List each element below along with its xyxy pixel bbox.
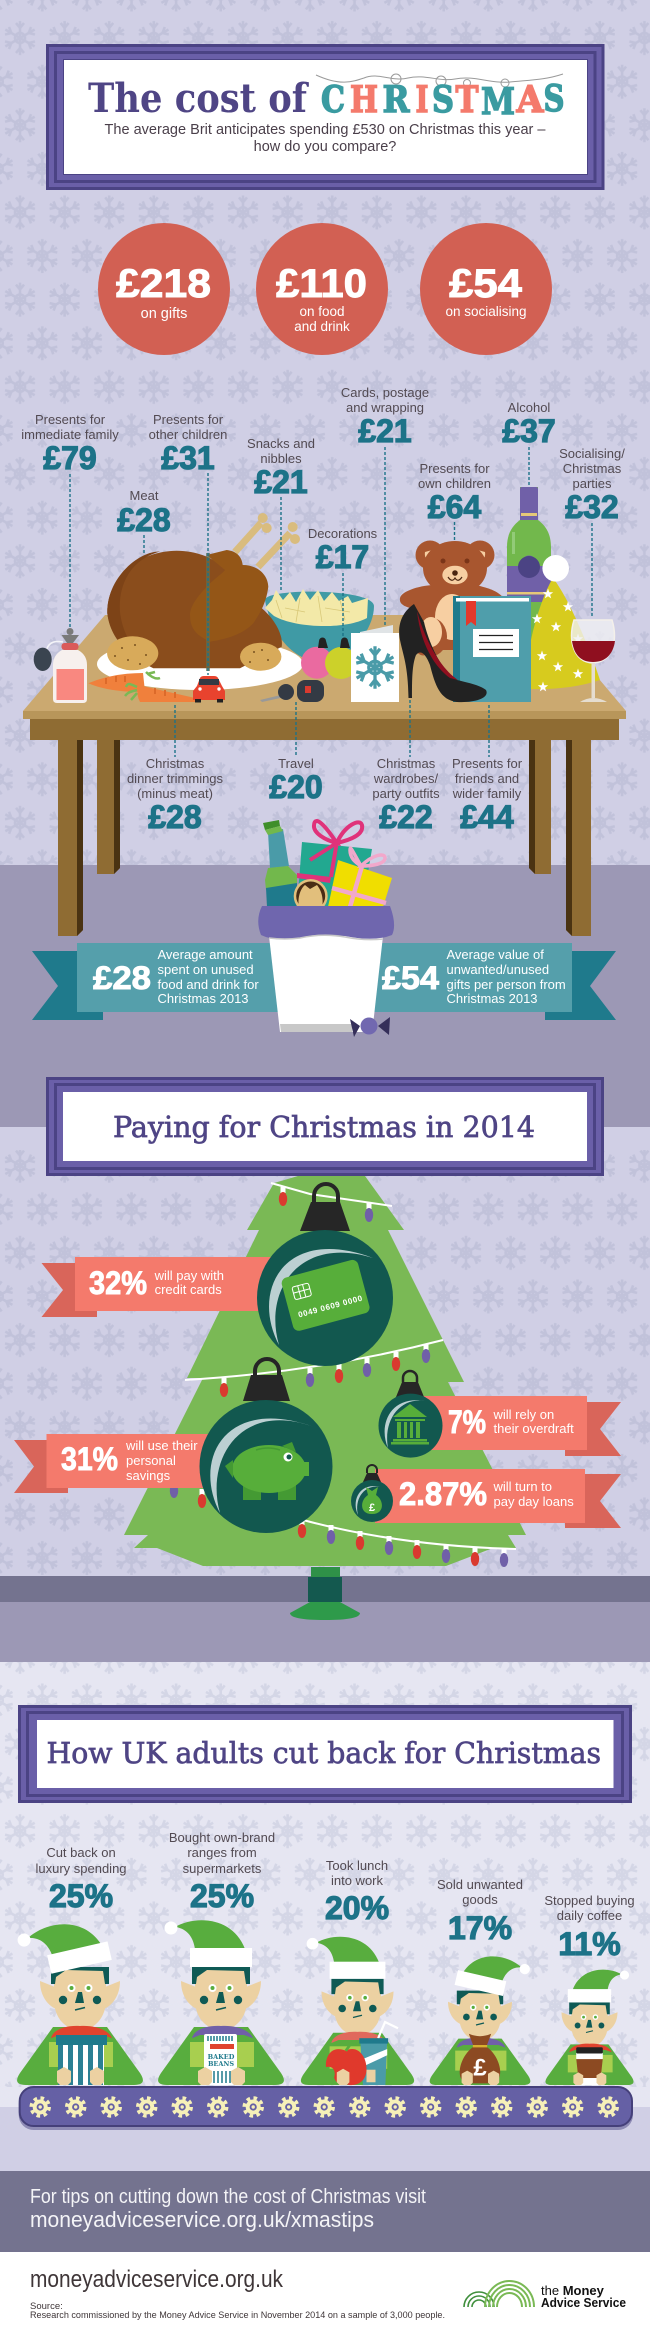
banner: credit cards: 32% [89,1265,147,1301]
stat circle: food and drink: on food [299,304,345,319]
label: snacks and nibbles [247,436,315,500]
label: dinner trimmings: (minus meat) [137,786,213,801]
label: lunch into work: Took lunch [326,1858,388,1873]
conveyor belt [19,2087,633,2130]
label: presents for other children: Presents for [153,412,224,427]
footer: Source: [30,2301,63,2312]
label: luxury spending [35,1845,127,1914]
label: own-brand ranges: Bought own-brand [169,1830,275,1845]
stat circle: socialising: on socialising [445,304,527,319]
label: own-brand ranges: 25% [190,1878,254,1914]
stat: unused food [93,947,259,1006]
icon: money bag: £ [369,1502,375,1514]
label: lunch into work: into work [331,1873,384,1888]
icon: party hat [531,555,600,691]
banner: pay day loans [375,1469,621,1528]
heading: bauble letters CHRISTMAS: R [382,79,410,121]
banner: credit cards: will pay with [154,1268,224,1283]
elf: baked beans: BAKED [208,2053,235,2061]
label: wardrobes [372,756,440,835]
heading: bauble letters CHRISTMAS: T [456,79,479,121]
bauble: money bag [351,1465,393,1522]
panel: top wallpaper [0,0,650,865]
label: sold unwanted goods: Sold unwanted [437,1877,523,1892]
label: daily coffee: 11% [558,1926,621,1962]
tree section heading [46,1077,604,1176]
banner: pay day loans: 2.87% [399,1476,487,1512]
icon: piggy bank [225,1442,309,1500]
label: socialising: parties [572,476,612,491]
icon: book [453,596,531,702]
subtitle: The average Brit anticipates spending £530 on Christmas this year – [104,122,546,138]
icon: Christmas card [351,625,399,702]
call to action banner: moneyadviceservice.org.uk/xmastips [30,2207,374,2232]
icon: wine glass [572,620,615,702]
label: decorations [308,526,378,575]
call to action banner [0,2171,650,2252]
stat: unused food: food and drink for [158,977,259,992]
label: luxury spending: luxury spending [35,1861,127,1876]
label: dinner trimmings: Christmas [146,756,205,771]
panel: top floor [0,865,650,1127]
elf: lunch [301,1937,414,2085]
label: presents for immediate family: immediate family [21,427,119,442]
banner: personal savings: personal [126,1453,176,1468]
label: alcohol: £37 [502,413,556,449]
stat: unused gifts: Average value of [446,947,544,962]
heading: bauble letters CHRISTMAS: C [321,79,345,121]
stat circle: food and drink: and drink [294,319,350,334]
banner: credit cards [42,1257,275,1317]
label: socialising: £32 [565,489,619,525]
label: sold unwanted goods: goods [462,1892,498,1907]
label: snacks and nibbles: Snacks and [247,436,315,451]
banner: overdraft: will rely on [492,1407,554,1422]
label: wardrobes: Christmas [377,756,436,771]
elf: coffee [545,1970,634,2085]
stat circle: food and drink [256,223,388,355]
label: cards, postage and wrapping [341,385,429,449]
label: daily coffee [544,1893,635,1962]
stat: unused food: spent on unused [158,962,254,977]
stat circle: gifts: on gifts [141,306,187,322]
stat: unused food: Christmas 2013 [158,991,249,1006]
bauble: bank [378,1371,442,1458]
heading: The cost of: The cost of [88,75,309,122]
label: dinner trimmings [127,756,224,835]
stat circle: food and drink: £110 [276,262,367,306]
heading: bauble letters CHRISTMAS: S [544,78,564,120]
label: own-brand ranges: supermarkets [183,1861,262,1876]
icon: bank [391,1404,429,1444]
title panel [46,44,604,190]
footer: Research commissioned by the Money Advice Service in November 2014 on a sample of 3,000 people. [30,2310,445,2321]
cut-back section heading [18,1705,632,1803]
label: socialising: Socialising/ [559,446,625,461]
label: cards, postage and wrapping: and wrapping [346,400,424,415]
label: cards, postage and wrapping: Cards, postage [341,385,429,400]
banner: pay day loans: pay day loans [494,1494,574,1509]
icon: teddy bear [400,540,505,656]
stat: unused food: Average amount [158,947,253,962]
label: lunch into work: 20% [325,1890,389,1926]
label: wardrobes: wardrobes/ [373,771,439,786]
icon: wine bottle [507,487,551,640]
stat: unused food: £28 [93,960,151,996]
heading: bauble letters CHRISTMAS: M [481,81,515,123]
ribbon banner [32,943,616,1020]
label: friends and family: wider family [452,786,522,801]
stat circle: gifts [98,223,230,355]
subtitle second line: how do you compare? [254,139,396,155]
stat circle: gifts: £218 [116,262,211,306]
heading: bauble letters CHRISTMAS: S [432,79,454,121]
label: sold unwanted goods: 17% [448,1910,512,1946]
label: decorations: £17 [316,539,369,575]
chart: Christmas tree [124,1176,526,1620]
footer: moneyadviceservice.org.uk [30,2266,284,2293]
elf: gift box [16,1914,143,2085]
label: own-brand ranges: ranges from [187,1845,257,1860]
elf: baked beans: BEANS [208,2060,234,2068]
stat: unused gifts: £54 [382,960,439,996]
dotted leader lines [70,447,592,757]
stat: unused gifts: unwanted/unused [446,962,549,977]
icon: sweet [350,1017,390,1037]
icon: high heel shoe [399,604,487,702]
label: own-brand ranges [169,1830,275,1914]
label: presents for other children [149,412,227,476]
heading: bauble letters CHRISTMAS: I [416,79,428,121]
heading text: How UK adults cut back for Christmas [46,1736,601,1770]
icon: turkey on plate [97,513,303,690]
banner: personal savings: 31% [61,1441,118,1477]
icon: carrots [88,672,195,702]
label: decorations: Decorations [308,526,378,541]
label: luxury spending: 25% [49,1878,113,1914]
stat circle: socialising: £54 [449,262,523,306]
footer [0,2252,650,2337]
icon: perfume bottle [34,628,87,703]
icon: toy car [193,676,225,702]
fairy lights [170,1183,516,1567]
heading text: Paying for Christmas in 2014 [113,1110,535,1144]
icon: waste bin with food and gifts [258,820,394,1037]
label: meat: Meat [130,488,159,503]
label: luxury spending: Cut back on [46,1845,116,1860]
icon: car keys [260,680,324,702]
label: presents for own children: £64 [428,489,481,525]
label: presents for other children: £31 [161,440,215,476]
label: socialising: Christmas [563,461,622,476]
bauble: credit card [257,1184,393,1366]
label: dinner trimmings: dinner trimmings [127,771,224,786]
stat: unused gifts: gifts per person from [446,977,566,992]
label: friends and family: £44 [460,799,514,835]
banner: credit cards: credit cards [155,1282,222,1297]
label: socialising [559,446,625,525]
logo: Money Advice Service [464,2281,626,2310]
label: wardrobes: party outfits [372,786,440,801]
icon: baubles [301,638,357,679]
label: presents for immediate family: Presents for [35,412,106,427]
banner: personal savings: savings [126,1468,171,1483]
logo: Money Advice Service: Advice Service [541,2295,626,2310]
label: wardrobes: £22 [379,799,433,835]
logo: Money Advice Service: the Money [541,2283,605,2298]
label: dinner trimmings: £28 [148,799,202,835]
label: daily coffee: daily coffee [557,1908,622,1923]
stat: unused gifts: Christmas 2013 [446,991,538,1006]
banner: overdraft: 7% [448,1404,486,1440]
label: daily coffee: Stopped buying [544,1893,635,1908]
panel: tree wallpaper [0,1127,650,1576]
label: friends and family: friends and [455,771,519,786]
label: presents for own children: Presents for [419,461,490,476]
icon: credit card: 0049 0609 0000 [297,1294,364,1319]
elf: money sack [430,1948,531,2085]
label: presents for own children: own children [418,476,491,491]
label: friends and family [452,756,523,835]
elf: baked beans [158,1920,284,2085]
label: cards, postage and wrapping: £21 [358,413,412,449]
label: lunch into work [325,1858,389,1926]
label: presents for immediate family: £79 [43,440,97,476]
banner: personal savings [14,1434,212,1493]
icon: snack bowl [265,589,374,662]
heading: bauble letters CHRISTMAS: A [516,79,545,121]
label: meat: £28 [117,502,171,538]
label: presents for other children: other children [149,427,227,442]
panel: skirting and floor [0,1576,650,1662]
label: sold unwanted goods [437,1877,523,1946]
label: friends and family: Presents for [452,756,523,771]
bauble: piggy bank [200,1359,332,1533]
label: alcohol: Alcohol [508,400,550,415]
panel: elves wallpaper [0,1662,650,2171]
call to action banner: For tips on cutting down the cost of Christmas visit [30,2186,426,2208]
heading: bauble letters CHRISTMAS [316,74,564,123]
table [23,615,626,936]
label: travel: £20 [269,769,323,805]
elf: money sack: £ [473,2054,487,2081]
banner: overdraft [417,1396,621,1456]
label: snacks and nibbles: nibbles [260,451,302,466]
banner: overdraft: their overdraft [494,1421,574,1436]
heading: bauble letters CHRISTMAS: H [350,79,378,121]
label: snacks and nibbles: £21 [254,464,308,500]
label: travel: Travel [278,756,314,771]
banner: personal savings: will use their [125,1438,198,1453]
label: presents for own children [418,461,491,525]
icon: credit card [280,1259,371,1332]
stat circle: socialising [420,223,552,355]
banner: pay day loans: will turn to [492,1479,552,1494]
label: presents for immediate family [21,412,119,476]
stat: unused gifts [382,947,566,1006]
